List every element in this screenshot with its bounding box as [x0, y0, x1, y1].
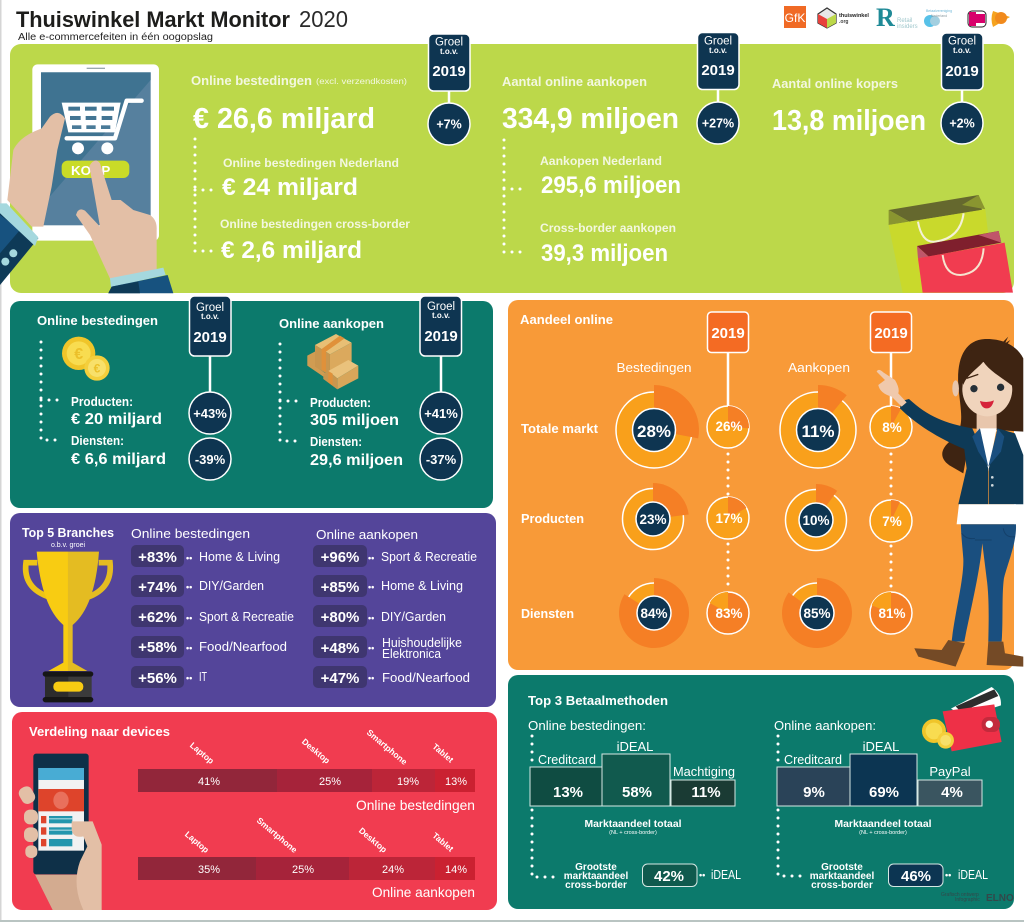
chart: online bestedingen bar: 25% [319, 776, 341, 788]
list: online bestedingen branches: Sport & Recreatie [199, 609, 294, 624]
growth badge: kopers +2%: Groel [948, 36, 976, 48]
bars: online bestedingen: 11% [691, 784, 721, 801]
list: online aankopen branches: •• [368, 553, 374, 563]
icon: coins: € [94, 361, 101, 375]
caption: marktaandeel totaal bestedingen: (NL + cross-border) [609, 830, 657, 836]
callout: cross-border iDEAL 46%: •• [945, 870, 951, 880]
list: online bestedingen branches: Home & Living [199, 549, 280, 564]
donut: bestedingen totale markt 28%: 28% [637, 422, 671, 441]
icon: tablet with shopping cart and hands: KOOP [71, 163, 110, 178]
value: bestedingen Nederland [222, 158, 399, 201]
donut: bestedingen producten 23% [622, 483, 689, 550]
list: online bestedingen branches: +74% [138, 579, 177, 596]
credit: graphic design: ELNO [986, 893, 1014, 904]
growth badge: bestedingen +7% [428, 34, 470, 145]
chart: online aankopen bar: Tablet [430, 830, 456, 854]
callout: cross-border iDEAL 42%: marktaandeel [564, 871, 628, 882]
bars: online aankopen: Creditcard [784, 752, 842, 767]
list: online aankopen branches: +96% [321, 549, 359, 566]
list: online bestedingen branches: +58% [138, 639, 177, 656]
callout: cross-border iDEAL 46%: marktaandeel [810, 871, 874, 882]
growth badge: aankopen +27%: +27% [702, 116, 734, 130]
callout: cross-border iDEAL 46%: 46% [901, 868, 931, 885]
value: diensten bestedingen: € 6,6 miljard [71, 451, 166, 468]
chart: online aankopen bar: 14% [445, 864, 467, 876]
list: online aankopen branches: •• [368, 643, 374, 653]
list: online aankopen branches: +80% [321, 609, 359, 626]
column 2019 aankopen: 8% [882, 420, 902, 435]
partner logos: Betaalvereniging [926, 9, 952, 13]
value: producten bestedingen [71, 395, 162, 428]
donut: aankopen totale markt 11%: 11% [801, 422, 835, 441]
heading: verdeling naar devices: Verdeling naar devices [29, 724, 170, 739]
dotted connector [280, 344, 298, 441]
growth badge: bestedingen +43% -39%: +43% [193, 406, 227, 421]
donut: aankopen totale markt 11% [780, 385, 856, 468]
bars: online aankopen: iDEAL [863, 739, 899, 754]
growth badge: aankopen +41% -37%: t.o.v. [432, 311, 450, 320]
partner logos [784, 3, 1010, 32]
list: online bestedingen branches: Food/Nearfood [199, 639, 287, 654]
credit: graphic design: Grafisch ontwerp [941, 892, 979, 898]
title [16, 6, 348, 43]
growth badge: aankopen +41% -37%: 2019 [424, 328, 458, 345]
partner logos: Nederland [931, 14, 947, 18]
value: 26,6 miljard: € 26,6 miljard [193, 103, 375, 135]
growth badge: aankopen +27%: Groel [704, 36, 732, 48]
chart: online aankopen bar: Laptop [183, 829, 211, 855]
list: online aankopen branches: +47% [321, 670, 359, 687]
list: online bestedingen branches [131, 526, 294, 688]
bars: online aankopen: 9% [803, 784, 825, 801]
dotted connector left [195, 139, 215, 251]
bars: online aankopen: Online aankopen: [774, 718, 876, 733]
value: aankopen Nederland: Aankopen Nederland [540, 156, 662, 168]
panel: verdeling naar devices [12, 712, 497, 910]
column 2019 aankopen: 7% [882, 514, 902, 529]
column 2019 bestedingen: 26% [715, 419, 743, 434]
donut: aankopen producten 10% [786, 484, 846, 550]
chart: online bestedingen bar: Smartphone [365, 727, 409, 767]
chart: online aankopen bar: 25% [292, 864, 314, 876]
list: online aankopen branches: +85% [321, 579, 359, 596]
list: online bestedingen branches: •• [186, 643, 192, 653]
callout: cross-border iDEAL 46%: iDEAL [958, 867, 988, 882]
icon: hand holding phone [17, 754, 102, 910]
list: online aankopen branches: •• [368, 673, 374, 683]
list: online aankopen branches: Elektronica [382, 647, 441, 661]
bars: online aankopen: 4% [941, 784, 963, 801]
partner logos: thuiswinkel [839, 13, 869, 19]
callout: cross-border iDEAL 46% [810, 862, 988, 891]
bars: online bestedingen [528, 718, 735, 877]
icon: tablet with shopping cart and hands [0, 64, 173, 293]
heading: online bestedingen: (excl. verzendkosten) [316, 76, 407, 86]
icon: shopping bags [889, 195, 1013, 293]
growth badge: aankopen +27%: 2019 [701, 62, 735, 79]
growth badge: bestedingen +43% -39%: t.o.v. [201, 312, 219, 321]
credit: graphic design [941, 892, 1014, 904]
column 2019 aankopen: 2019 [874, 325, 908, 342]
chart: online aankopen bar: Desktop [357, 825, 389, 855]
chart: online aankopen bar: Smartphone [255, 815, 299, 855]
partner logos: insiders [897, 24, 918, 30]
row label: totale markt: Totale markt [521, 422, 599, 436]
value: diensten aankopen: 29,6 miljoen [310, 452, 403, 469]
bars: online bestedingen: Creditcard [538, 752, 596, 767]
growth badge: bestedingen +7%: t.o.v. [440, 47, 458, 56]
value: producten bestedingen: € 20 miljard [71, 411, 162, 428]
caption: marktaandeel totaal aankopen [834, 819, 932, 836]
growth badge: aankopen +41% -37% [420, 296, 462, 480]
illustration: woman pointing [877, 337, 1023, 667]
growth badge: kopers +2% [941, 33, 983, 144]
column 2019 bestedingen: 83% [715, 606, 743, 621]
value: 13,8 miljoen: 13,8 miljoen [772, 105, 926, 137]
growth badge: bestedingen +43% -39%: -39% [195, 452, 226, 467]
list: online aankopen branches: Huishoudelijke [382, 636, 462, 650]
callout: cross-border iDEAL 46%: Grootste [821, 862, 863, 873]
growth badge: kopers +2%: 2019 [945, 63, 979, 80]
growth badge: aankopen +27%: t.o.v. [709, 46, 727, 55]
value: producten aankopen: Producten: [310, 396, 371, 410]
donut: aankopen diensten 85%: 85% [803, 606, 831, 621]
list: online bestedingen branches: Online bestedingen [131, 526, 250, 541]
panel: top 3 betaalmethoden [508, 675, 1014, 909]
donut: bestedingen producten 23%: 23% [639, 512, 667, 527]
chart: online bestedingen bar: 13% [445, 776, 467, 788]
partner logos: GfK [785, 11, 805, 25]
donut: bestedingen diensten 84%: 84% [640, 606, 668, 621]
value: diensten bestedingen [71, 434, 166, 468]
chart: online bestedingen bar: Tablet [430, 741, 456, 765]
growth badge: kopers +2%: t.o.v. [953, 46, 971, 55]
value: diensten bestedingen: Diensten: [71, 434, 124, 448]
growth badge: aankopen +41% -37%: -37% [426, 452, 457, 467]
list: online bestedingen branches: DIY/Garden [199, 578, 264, 593]
growth badge: bestedingen +7%: Groel [435, 36, 463, 48]
value: producten aankopen [310, 396, 399, 429]
column 2019 bestedingen [707, 312, 749, 634]
list: online bestedingen branches: +56% [138, 670, 177, 687]
caption: marktaandeel totaal aankopen: Marktaandeel totaal [834, 819, 932, 830]
title: Thuiswinkel Markt Monitor [16, 7, 290, 32]
list: online aankopen branches: •• [368, 582, 374, 592]
chart: online bestedingen bar: 19% [397, 776, 419, 788]
column 2019 aankopen [870, 312, 912, 634]
icon: boxes [307, 334, 358, 389]
bars: online bestedingen: Machtiging [673, 764, 735, 779]
chart: online bestedingen bar [138, 727, 475, 813]
donut: aankopen producten 10%: 10% [802, 513, 830, 528]
icon: coins: € [74, 346, 83, 363]
growth badge: aankopen +27% [697, 32, 739, 144]
value: aankopen Nederland: 295,6 miljoen [541, 172, 681, 199]
partner logos: .org [839, 19, 848, 25]
growth badge: kopers +2%: +2% [949, 116, 975, 130]
growth badge: bestedingen +43% -39% [189, 296, 231, 480]
heading: top 3 betaalmethoden: Top 3 Betaalmethoden [528, 693, 668, 708]
value: diensten aankopen: Diensten: [310, 435, 362, 449]
panel: aandeel online [508, 300, 1023, 670]
callout: cross-border iDEAL 42%: Grootste [575, 862, 617, 873]
chart: online aankopen bar: Online aankopen [372, 884, 475, 900]
row label: producten: Producten [521, 512, 584, 526]
list: online aankopen branches: +48% [321, 640, 359, 657]
list: online aankopen branches: Home & Living [381, 578, 463, 593]
partner logos: R [876, 3, 895, 32]
list: online bestedingen branches: •• [186, 553, 192, 563]
value: cross-border aankopen: 39,3 miljoen [541, 240, 668, 267]
value: producten bestedingen: Producten: [71, 395, 133, 409]
heading: aantal online aankopen: Aantal online aankopen [502, 74, 647, 89]
panel: top 5 branches [10, 513, 496, 707]
list: online aankopen branches: Online aankopen [316, 527, 418, 542]
callout: cross-border iDEAL 42%: •• [699, 870, 705, 880]
donut: aankopen diensten 85% [782, 578, 852, 648]
caption: marktaandeel totaal bestedingen: Marktaandeel totaal [584, 819, 682, 830]
column 2019 bestedingen: 2019 [711, 325, 745, 342]
growth badge: bestedingen +7%: 2019 [432, 63, 466, 80]
list: online aankopen branches: Sport & Recreatie [381, 549, 477, 564]
dotted connector [41, 342, 60, 440]
heading: online bestedingen: Online bestedingen [191, 73, 312, 88]
value: aankopen Nederland [540, 156, 681, 199]
bars: online bestedingen: Online bestedingen: [528, 718, 646, 733]
heading: online bestedingen: Online bestedingen [37, 313, 158, 328]
title: Alle e-commercefeiten in één oogopslag [18, 32, 213, 43]
title: 2020 [299, 6, 348, 32]
bars: online aankopen: PayPal [929, 764, 971, 779]
callout: cross-border iDEAL 42%: cross-border [565, 880, 627, 891]
bars: online aankopen: 69% [869, 784, 899, 801]
list: online aankopen branches: Food/Nearfood [382, 670, 470, 685]
heading: top 5 branches: Top 5 Branches [22, 526, 114, 540]
column 2019 aankopen: 81% [878, 606, 906, 621]
growth badge: bestedingen +43% -39%: 2019 [193, 329, 227, 346]
dotted connector middle [504, 140, 522, 252]
column label: bestedingen: Bestedingen [616, 360, 692, 375]
chart: online aankopen bar [138, 815, 475, 900]
value: bestedingen cross-border: Online bestedingen cross-border [220, 219, 411, 231]
panel: bestedingen en aankopen per type [10, 296, 493, 508]
growth badge: bestedingen +7%: +7% [436, 118, 462, 132]
callout: cross-border iDEAL 42% [564, 862, 741, 891]
list: online bestedingen branches: •• [186, 673, 192, 683]
value: bestedingen cross-border: € 2,6 miljard [221, 237, 362, 264]
chart: online bestedingen bar: Online bestedingen [356, 797, 475, 813]
column 2019 bestedingen: 17% [715, 511, 743, 526]
value: cross-border aankopen [540, 223, 676, 267]
value: bestedingen Nederland: € 24 miljard [222, 174, 358, 201]
callout: cross-border iDEAL 42%: iDEAL [711, 867, 741, 882]
heading: online aankopen: Online aankopen [279, 316, 384, 331]
callout: cross-border iDEAL 42%: 42% [654, 868, 684, 885]
credit: graphic design: Infographic [955, 897, 980, 903]
list: online bestedingen branches: •• [186, 582, 192, 592]
list: online aankopen branches: •• [368, 613, 374, 623]
growth badge: aankopen +41% -37%: Groel [427, 301, 455, 313]
callout: cross-border iDEAL 46%: cross-border [811, 880, 873, 891]
list: online bestedingen branches: +83% [138, 549, 177, 566]
icon: coins [62, 337, 110, 381]
value: producten aankopen: 305 miljoen [310, 412, 399, 429]
list: online bestedingen branches: +62% [138, 609, 177, 626]
heading: aandeel online: Aandeel online [520, 313, 613, 327]
partner logos: Retail [897, 18, 912, 24]
heading: aantal online kopers: Aantal online kopers [772, 76, 898, 91]
value: cross-border aankopen: Cross-border aankopen [540, 223, 676, 235]
chart: online bestedingen bar: Laptop [188, 740, 216, 766]
list: online bestedingen branches: •• [186, 613, 192, 623]
value: bestedingen Nederland: Online bestedingen Nederland [223, 158, 399, 170]
list: online aankopen branches [313, 527, 477, 688]
list: online bestedingen branches: IT [199, 669, 207, 684]
bars: online bestedingen: 58% [622, 784, 652, 801]
caption: marktaandeel totaal aankopen: (NL + cross-border) [859, 830, 907, 836]
bars: online aankopen [774, 718, 982, 876]
donut: bestedingen totale markt 28% [616, 385, 699, 468]
chart: online bestedingen bar: Desktop [300, 736, 332, 766]
bars: online bestedingen: iDEAL [617, 739, 653, 754]
list: online aankopen branches: DIY/Garden [381, 609, 446, 624]
value: 334,9 miljoen: 334,9 miljoen [502, 103, 679, 135]
chart: online aankopen bar: 35% [198, 864, 220, 876]
bars: online bestedingen: 13% [553, 784, 583, 801]
caption: marktaandeel totaal bestedingen [584, 819, 682, 836]
heading: online bestedingen [191, 73, 407, 88]
heading: top 5 branches: o.b.v. groei [51, 542, 85, 549]
row label: diensten: Diensten [521, 607, 574, 621]
chart: online bestedingen bar: 41% [198, 776, 220, 788]
icon: wallet with coins [922, 687, 1002, 751]
value: diensten aankopen [310, 435, 403, 469]
growth badge: bestedingen +43% -39%: Groel [196, 302, 224, 314]
column label: aankopen: Aankopen [788, 360, 850, 375]
chart: online aankopen bar: 24% [382, 864, 404, 876]
heading: top 5 branches [22, 526, 114, 549]
panel: online totals [0, 32, 1014, 293]
icon: trophy [26, 552, 110, 702]
growth badge: aankopen +41% -37%: +41% [424, 406, 458, 421]
donut: bestedingen diensten 84% [619, 578, 689, 648]
value: bestedingen cross-border [220, 219, 411, 264]
